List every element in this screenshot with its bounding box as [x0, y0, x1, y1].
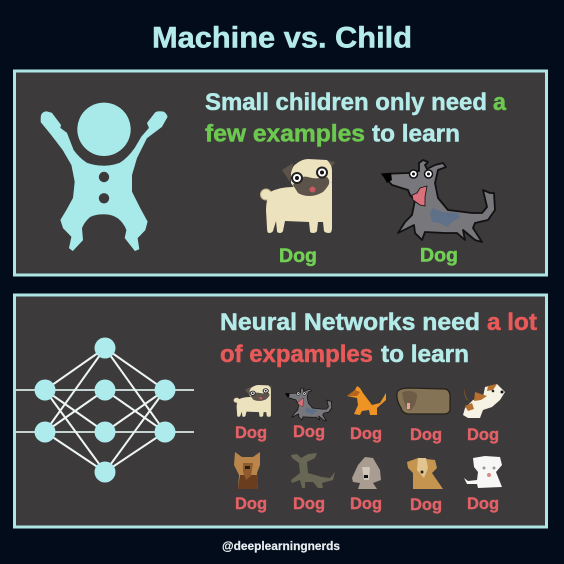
footer handle: @deeplearningnerds — [222, 541, 340, 553]
dog: small gray — [285, 388, 332, 421]
dog row 1 — [234, 384, 505, 421]
dog: poodle — [352, 457, 381, 489]
heading: a lot of examples: Neural Networks need — [220, 309, 480, 336]
heading: a lot of examples: to learn — [381, 341, 469, 368]
labels: red dog row 2 — [235, 495, 499, 514]
dog row 2 — [234, 452, 502, 489]
heading: few examples: a — [493, 89, 507, 116]
chart: neural network diagram — [16, 338, 194, 482]
labels: red dog row 2: Dog — [410, 496, 442, 514]
dog: shaggy brown — [397, 388, 450, 414]
label: dog green 2: Dog — [420, 244, 458, 266]
dog: small pug — [234, 385, 272, 417]
labels: red dog row 1: Dog — [350, 425, 382, 443]
dog: olive — [291, 453, 335, 488]
dog: white and brown spotted — [463, 384, 505, 418]
labels: red dog row 2: Dog — [235, 495, 267, 513]
heading: a lot of examples: of expamples — [220, 341, 373, 368]
heading: few examples: Small children only need — [205, 89, 487, 116]
labels: red dog row 2: Dog — [350, 495, 382, 513]
heading: few examples: to learn — [372, 120, 460, 148]
labels: red dog row 1: Dog — [410, 426, 442, 444]
panel: neural network — [14, 295, 546, 527]
label: dog green 1: Dog — [279, 245, 317, 267]
dog: tan — [407, 458, 443, 489]
dog: pug — [260, 159, 335, 233]
heading: a lot of examples — [220, 309, 537, 368]
labels: red dog row 1: Dog — [235, 424, 267, 442]
title: Machine vs. Child — [152, 22, 412, 54]
labels: red dog row 1 — [235, 423, 499, 444]
labels: red dog row 2: Dog — [467, 495, 499, 513]
heading: few examples — [205, 89, 507, 148]
dog: orange — [347, 386, 386, 415]
heading: few examples: few examples — [205, 120, 365, 148]
heading: a lot of examples: a lot — [487, 309, 537, 336]
panel: child — [14, 71, 546, 275]
labels: red dog row 2: Dog — [293, 495, 325, 513]
dog: white — [464, 456, 502, 488]
labels: red dog row 1: Dog — [293, 423, 325, 441]
labels: red dog row 1: Dog — [467, 426, 499, 444]
dog: gray — [382, 160, 495, 242]
icon: baby — [41, 103, 167, 251]
dog: yorkie — [234, 452, 260, 489]
